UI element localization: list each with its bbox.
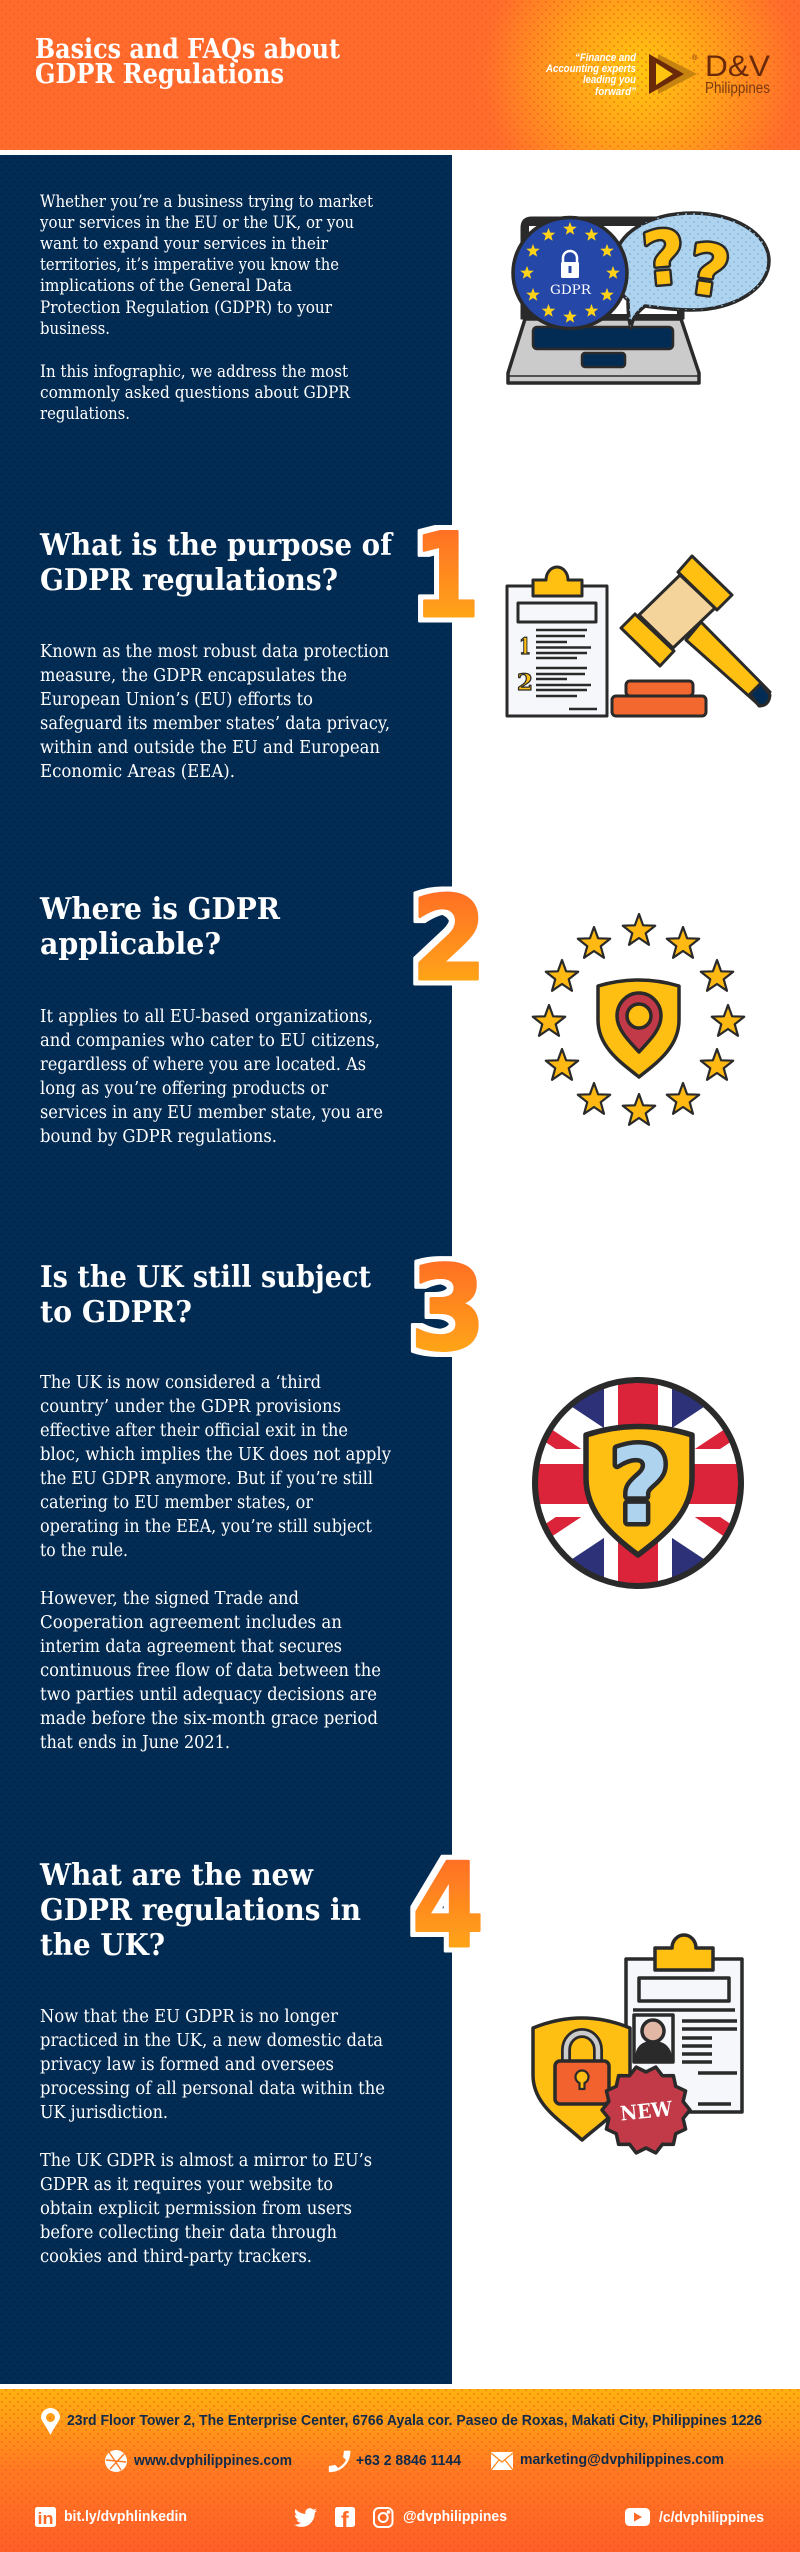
- text: section 1: Economic Areas (EEA).: [40, 762, 235, 782]
- text: section 4: practiced in the UK, a new domestic data: [40, 2031, 383, 2051]
- question marks: [639, 214, 735, 314]
- intro text: regulations.: [40, 404, 130, 423]
- text: section 4: [40, 2007, 385, 2267]
- text: section 4: The UK GDPR is almost a mirror to EU’s: [40, 2151, 372, 2171]
- intro text: business.: [40, 319, 110, 338]
- number 1: 1: [413, 509, 480, 644]
- email: marketing@dvphilippines.com: [520, 2451, 724, 2468]
- heading: section 4: [39, 1858, 361, 1963]
- text: section 4: obtain explicit permission from users: [40, 2199, 352, 2219]
- text: section 4: before collecting their data through: [40, 2223, 337, 2243]
- tagline: leading you: [583, 74, 636, 86]
- map pin: [617, 993, 661, 1052]
- intro text: want to expand your services in their: [40, 234, 328, 253]
- logo: D&V Philippines: Philippines: [705, 80, 770, 97]
- text: section 3: country’ under the GDPR provisions: [40, 1397, 341, 1417]
- intro text: implications of the General Data: [40, 276, 292, 295]
- text: section 4: privacy law is formed and oversees: [40, 2055, 334, 2075]
- intro text: [39, 192, 373, 423]
- icon: YouTube: [625, 2508, 650, 2526]
- icon: envelope: [491, 2452, 513, 2470]
- icon: UK flag with question shield: [532, 1377, 744, 1589]
- heading: section 4: GDPR regulations in: [40, 1893, 361, 1928]
- heading: section 3: Is the UK still subject: [40, 1260, 371, 1295]
- text: section 2: It applies to all EU-based organizations,: [40, 1007, 373, 1027]
- logo: D&V Philippines: [649, 50, 770, 97]
- logo: D&V Philippines: D&V: [705, 50, 770, 83]
- icon: location pin: [41, 2408, 60, 2435]
- title: [35, 34, 340, 90]
- text: section 3: Cooperation agreement includes an: [40, 1613, 342, 1633]
- text: section 1: within and outside the EU and European: [40, 738, 380, 758]
- text: section 2: long as you’re offering products or: [40, 1079, 329, 1099]
- title: Basics and FAQs about: [35, 34, 340, 65]
- footer: [0, 2389, 800, 2552]
- icon: phone: [329, 2451, 350, 2472]
- number 3: 3: [410, 1242, 486, 1377]
- text: section 3: catering to EU member states, or: [40, 1493, 314, 1513]
- icon: globe: [105, 2450, 127, 2472]
- tagline: “Finance and: [575, 52, 636, 64]
- intro text: territories, it’s imperative you know the: [40, 255, 339, 274]
- icon: clipboard and gavel: [507, 556, 770, 716]
- heading: section 1: GDPR regulations?: [40, 563, 338, 598]
- website: www.dvphilippines.com: [133, 2452, 292, 2469]
- tagline: [545, 52, 636, 98]
- clipboard: [507, 586, 607, 716]
- question marks: ?: [683, 228, 735, 314]
- text: section 3: However, the signed Trade and: [40, 1589, 299, 1609]
- text: section 1: measure, the GDPR encapsulates the: [40, 666, 347, 686]
- icon: clipboard and gavel: 2: [517, 670, 533, 696]
- icon: Instagram: [374, 2508, 392, 2527]
- icon: LinkedIn: [35, 2507, 56, 2528]
- YouTube handle: /c/dvphilippines: [659, 2510, 764, 2526]
- NEW badge: NEW: [619, 2096, 674, 2126]
- heading: section 3: to GDPR?: [40, 1295, 192, 1330]
- text: section 3: the EU GDPR anymore. But if you’re still: [40, 1469, 373, 1489]
- text: section 3: The UK is now considered a ‘third: [40, 1373, 321, 1393]
- heading: section 1: [39, 528, 394, 598]
- intro text: commonly asked questions about GDPR: [40, 383, 351, 402]
- shield: [598, 980, 679, 1077]
- document: [626, 1959, 742, 2112]
- intro text: your services in the EU or the UK, or you: [39, 213, 354, 232]
- text: section 3: [40, 1373, 391, 1753]
- text: section 3: made before the six-month grace period: [40, 1709, 378, 1729]
- icon: LinkedIn: in: [38, 2509, 54, 2528]
- phone number: +63 2 8846 1144: [356, 2452, 462, 2469]
- Instagram handle: @dvphilippines: [403, 2509, 507, 2525]
- icon: Twitter: [294, 2508, 317, 2527]
- heading: section 2: [39, 892, 281, 962]
- icon: Facebook: f: [341, 2507, 349, 2533]
- text: section 2: [40, 1007, 383, 1147]
- text: section 3: two parties until adequacy decisions are: [40, 1685, 377, 1705]
- text: section 3: effective after their official exit in the: [40, 1421, 348, 1441]
- laptop base: [508, 319, 699, 383]
- text: section 4: UK jurisdiction.: [40, 2103, 168, 2123]
- text: section 1: European Union’s (EU) efforts to: [40, 690, 313, 710]
- text: section 3: bloc, which implies the UK does not apply: [40, 1445, 391, 1465]
- text: section 4: Now that the EU GDPR is no longer: [40, 2007, 339, 2027]
- seal label: GDPR: [550, 283, 592, 298]
- text: section 4: cookies and third-party trackers.: [40, 2247, 312, 2267]
- padlock: [561, 251, 579, 278]
- text: section 3: continuous free flow of data between the: [40, 1661, 381, 1681]
- text: section 2: and companies who cater to EU citizens,: [40, 1031, 380, 1051]
- navy content panel: [0, 155, 452, 2384]
- laptop screen: [521, 217, 684, 319]
- intro text: Protection Regulation (GDPR) to your: [40, 298, 332, 317]
- text: section 2: services in any EU member state, you are: [40, 1103, 383, 1123]
- heading: section 1: What is the purpose of: [39, 528, 394, 563]
- LinkedIn handle: bit.ly/dvphlinkedin: [64, 2509, 187, 2525]
- heading: section 4: What are the new: [39, 1858, 314, 1893]
- text: section 4: GDPR as it requires your website to: [40, 2175, 333, 2195]
- question marks: ?: [639, 214, 689, 304]
- text: section 4: processing of all personal data within the: [40, 2079, 385, 2099]
- title: GDPR Regulations: [35, 59, 284, 90]
- icon: clipboard and gavel: 1: [519, 634, 531, 660]
- heading: section 2: applicable?: [40, 927, 221, 962]
- intro text: In this infographic, we address the most: [40, 362, 348, 381]
- text: section 1: Known as the most robust data protection: [40, 642, 389, 662]
- number 2: 2: [411, 872, 487, 1007]
- text: section 2: bound by GDPR regulations.: [40, 1127, 277, 1147]
- text lines: [633, 2010, 737, 2104]
- heading: section 3: [40, 1260, 371, 1330]
- icon: EU stars around location shield: [533, 914, 744, 1125]
- heading: section 4: the UK?: [40, 1928, 165, 1963]
- icon: Facebook: [335, 2507, 355, 2533]
- icon: document, lock shield and NEW badge: [533, 1935, 742, 2153]
- question mark: ?: [610, 1425, 670, 1547]
- speech bubble: [615, 213, 769, 328]
- text: section 1: safeguard its member states’ data privacy,: [40, 714, 390, 734]
- portrait: [634, 2015, 673, 2062]
- text: section 2: regardless of where you are located. As: [40, 1055, 366, 1075]
- text: section 1: [40, 642, 390, 782]
- tagline: Accounting experts: [545, 63, 636, 75]
- text: section 3: that ends in June 2021.: [40, 1733, 230, 1753]
- text: section 3: to the rule.: [40, 1541, 128, 1561]
- address: 23rd Floor Tower 2, The Enterprise Center, 6766 Ayala cor. Paseo de Roxas, Makati City, Philippines 1226: [67, 2412, 762, 2429]
- logo: D&V Philippines: ®: [692, 54, 698, 62]
- NEW badge: [602, 2067, 690, 2153]
- text: section 3: operating in the EEA, you’re still subject: [40, 1517, 372, 1537]
- tagline: forward”: [595, 86, 636, 98]
- intro text: Whether you’re a business trying to market: [40, 192, 373, 211]
- number 4: 4: [412, 1839, 484, 1974]
- gavel: [686, 622, 770, 706]
- EU circle: [513, 218, 627, 328]
- header banner: [0, 0, 800, 150]
- shield: [586, 1426, 692, 1555]
- lock shield: [533, 2018, 630, 2140]
- text: section 3: interim data agreement that secures: [40, 1637, 342, 1657]
- heading: section 2: Where is GDPR: [39, 892, 281, 927]
- icon: laptop with GDPR seal and question bubble: [508, 213, 769, 383]
